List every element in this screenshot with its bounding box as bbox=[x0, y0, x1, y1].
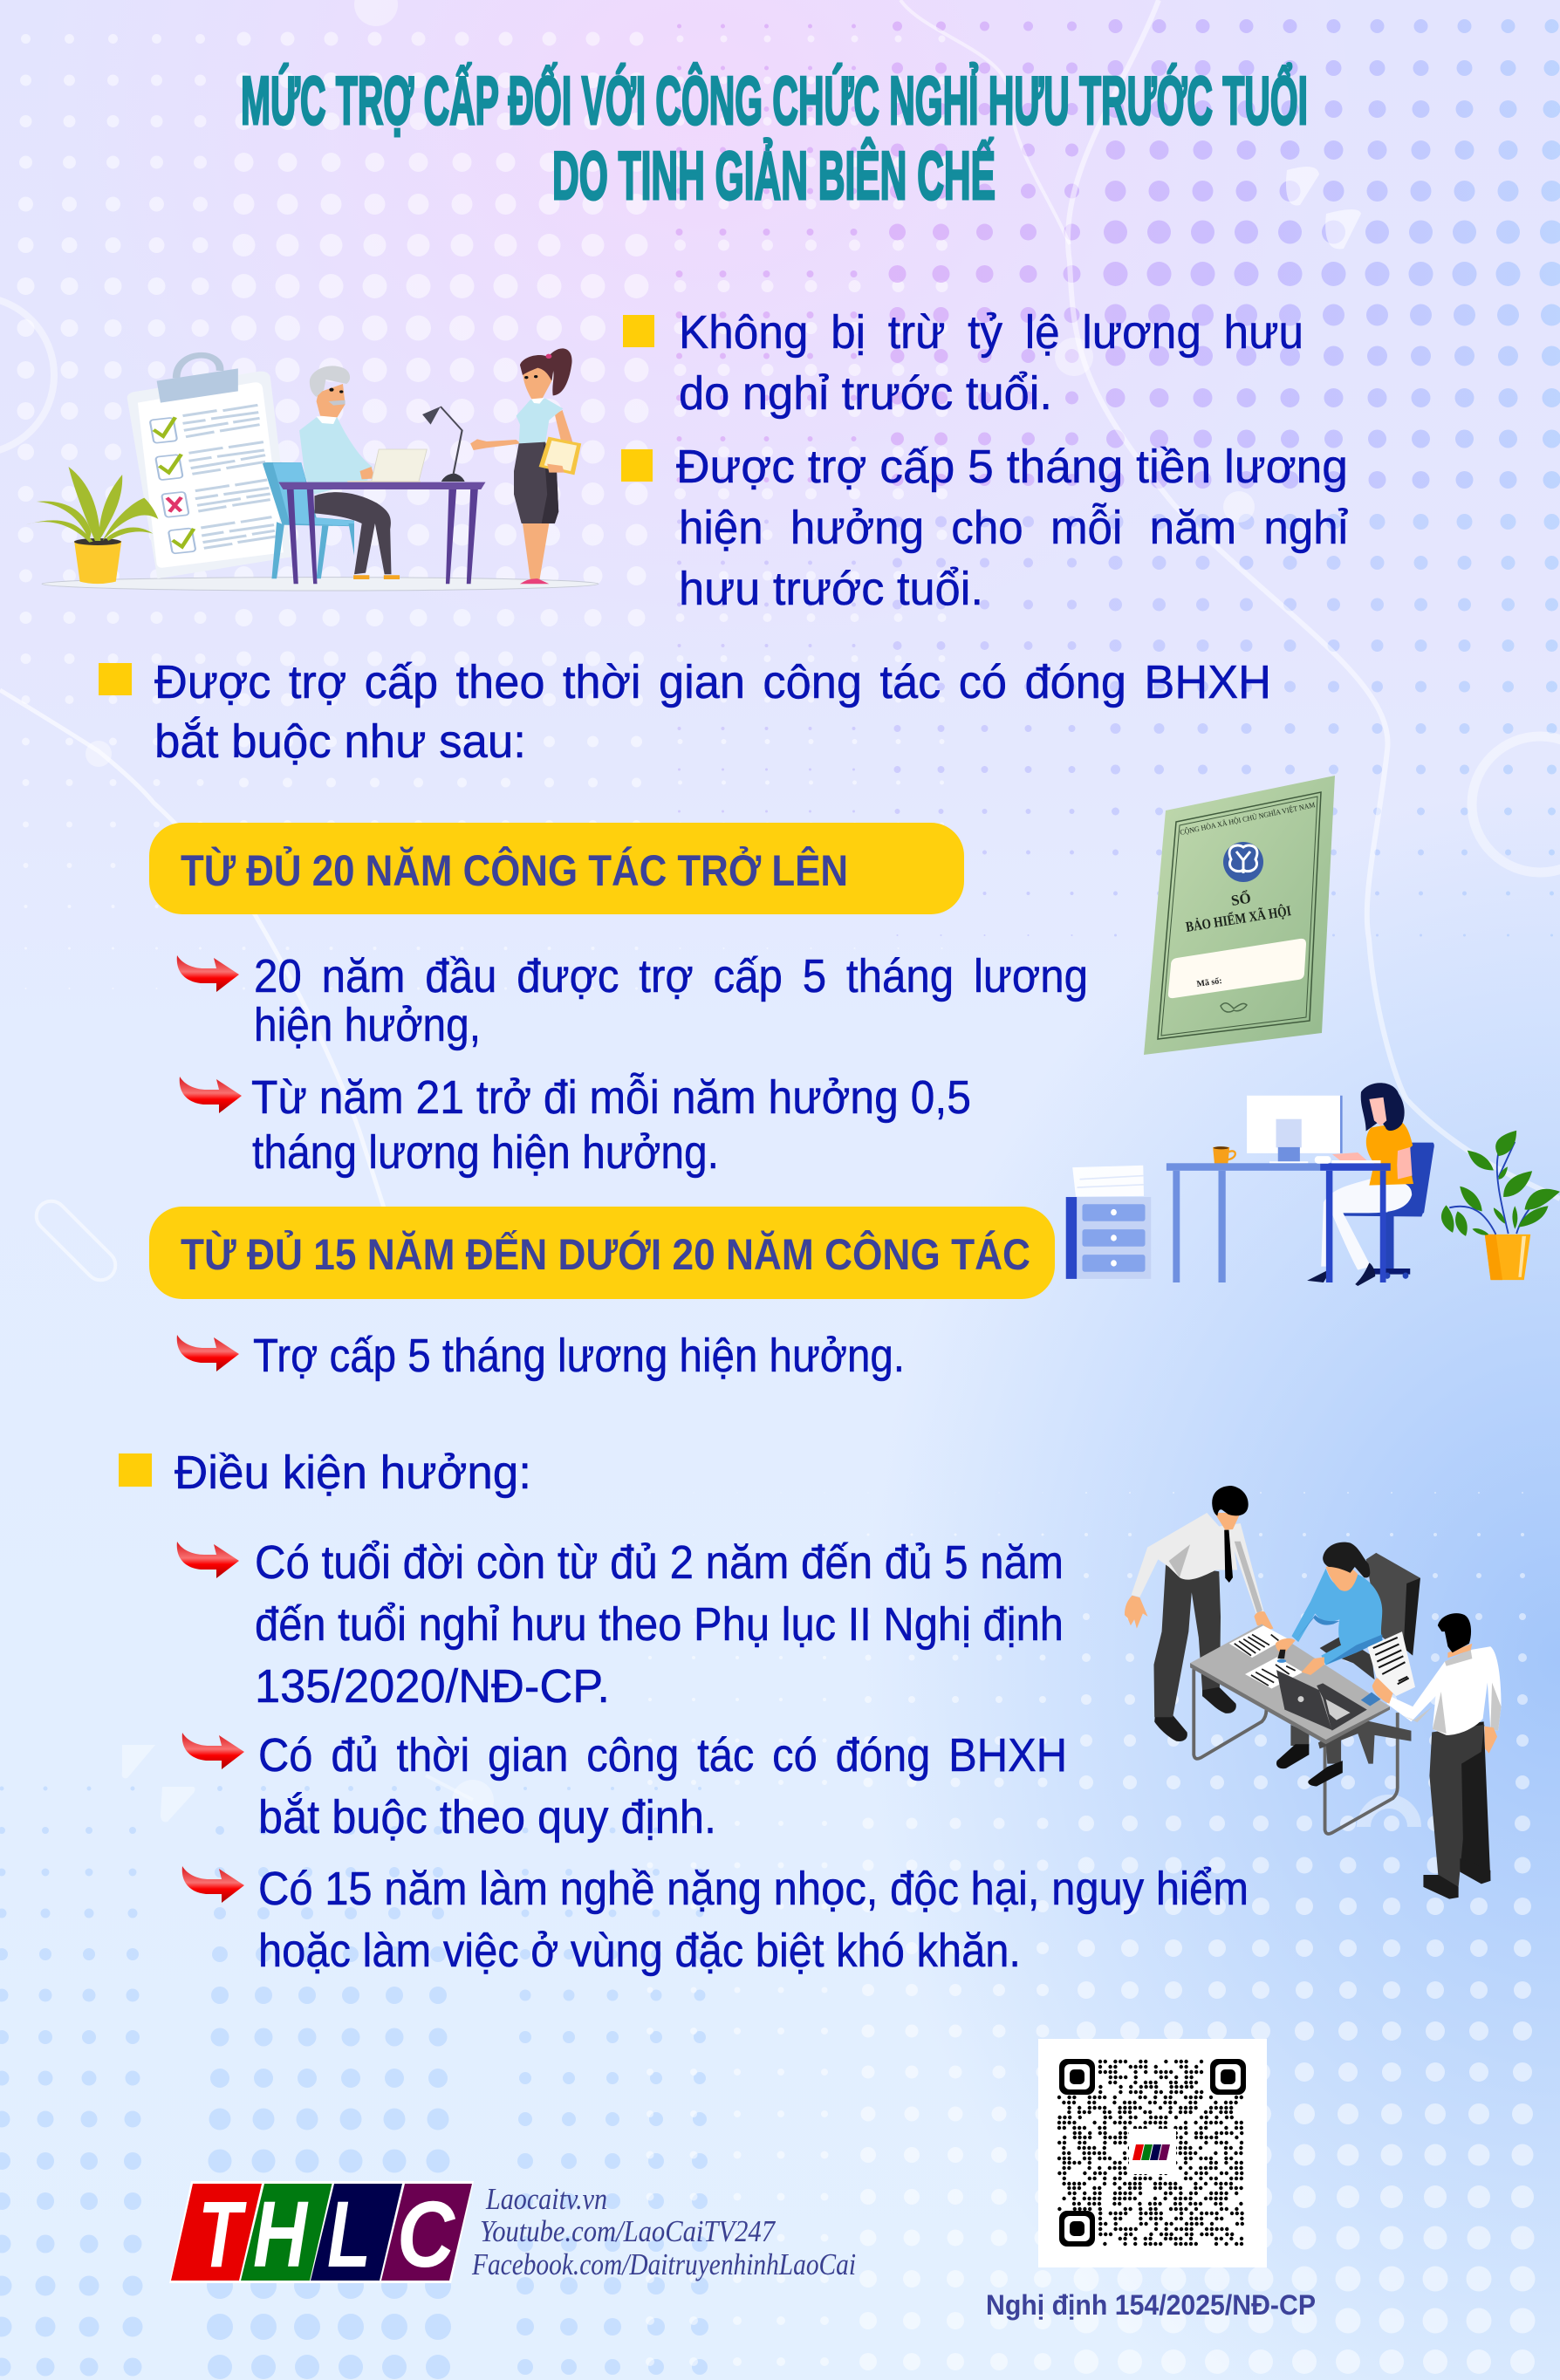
bullet: allowance by working time bbox=[99, 656, 1271, 768]
icon: red arrow bbox=[177, 1335, 239, 1371]
illustration: social insurance book: SỔ bbox=[1229, 889, 1252, 909]
item: from year 21: Từ năm 21 trở đi mỗi năm hưởng 0,5 bbox=[251, 1071, 971, 1124]
bullet: allowance by working time: Được trợ cấp theo thời gian công tác có đóng BHXH bbox=[154, 656, 1271, 708]
bullet: allowance by working time: bắt buộc như sau: bbox=[154, 715, 526, 768]
condition: social insurance period: Có đủ thời gian công tác có đóng BHXH bbox=[258, 1729, 1067, 1782]
illustration: social insurance book: BẢO HIỂM XÃ HỘI bbox=[1185, 902, 1292, 935]
heading pill: 20 years or more bbox=[149, 823, 964, 914]
station links: Laocaitv.vn bbox=[485, 2182, 607, 2216]
illustration: three colleagues at table bbox=[1125, 1486, 1502, 1899]
bullet: eligibility conditions: Điều kiện hưởng: bbox=[174, 1446, 531, 1499]
person: standing man with paper bbox=[1367, 1613, 1502, 1899]
condition: social insurance period: bắt buộc theo quy định. bbox=[258, 1791, 716, 1843]
heading pill: 15 to under 20 years: TỪ ĐỦ 15 NĂM ĐẾN DƯỚI 20 NĂM CÔNG TÁC bbox=[181, 1229, 1030, 1279]
condition: age: đến tuổi nghỉ hưu theo Phụ lục II Nghị định bbox=[255, 1598, 1064, 1651]
item: 5 months allowance: Trợ cấp 5 tháng lương hiện hưởng. bbox=[253, 1330, 905, 1382]
station links bbox=[471, 2182, 856, 2281]
condition: age bbox=[177, 1536, 1064, 1713]
bullet marker bbox=[621, 449, 653, 482]
table with papers bbox=[1190, 1624, 1411, 1834]
illustration: social insurance book: Mã số: bbox=[1196, 976, 1222, 989]
title bbox=[241, 62, 1308, 214]
illustration: woman at desk with cabinet and plant bbox=[1066, 1083, 1560, 1286]
logo: THLC: L bbox=[327, 2181, 371, 2287]
person: standing man with tie bbox=[1125, 1486, 1273, 1741]
station links: Facebook.com/DaitruyenhinhLaoCai bbox=[471, 2247, 856, 2281]
bullet list: top right: hiện hưởng cho mỗi năm nghỉ bbox=[679, 502, 1348, 554]
icon: red arrow bbox=[180, 1077, 242, 1113]
item: from year 21: tháng lương hiện hưởng. bbox=[252, 1126, 719, 1179]
emblem bbox=[1223, 842, 1263, 882]
bullet list: top right: Không bị trừ tỷ lệ lương hưu bbox=[679, 306, 1303, 359]
icon: red arrow bbox=[177, 955, 239, 992]
station links: Youtube.com/LaoCaiTV247 bbox=[480, 2214, 776, 2248]
illustration: social insurance book bbox=[1144, 776, 1335, 1055]
QR code bbox=[1038, 2039, 1267, 2267]
bullet list: top right bbox=[621, 306, 1348, 615]
title: DO TINH GIẢN BIÊN CHẾ bbox=[552, 137, 996, 214]
item: from year 21 bbox=[180, 1071, 971, 1179]
condition: age: 135/2020/NĐ-CP. bbox=[255, 1660, 610, 1713]
icon: red arrow bbox=[182, 1866, 244, 1903]
heading pill: 20 years or more: TỪ ĐỦ 20 NĂM CÔNG TÁC TRỞ LÊN bbox=[181, 845, 848, 895]
condition: hazardous work bbox=[182, 1863, 1249, 1977]
bullet list: top right: Được trợ cấp 5 tháng tiền lương bbox=[676, 441, 1348, 493]
icon: red arrow bbox=[177, 1542, 239, 1578]
person: seated woman bbox=[1276, 1542, 1420, 1679]
item: first 20 years: hiện hưởng, bbox=[254, 999, 481, 1051]
logo: THLC bbox=[169, 2181, 474, 2287]
illustration: office workers and checklist bbox=[25, 332, 599, 591]
logo: THLC: T bbox=[198, 2181, 247, 2287]
illustration: social insurance book: CỘNG HÒA XÃ HỘI CHỦ NGHĨA VIỆT NAM bbox=[1179, 800, 1317, 837]
bullet list: top right: do nghỉ trước tuổi. bbox=[679, 367, 1052, 420]
bullet list: top right: hưu trước tuổi. bbox=[679, 563, 983, 615]
item: first 20 years bbox=[177, 950, 1088, 1051]
item: first 20 years: 20 năm đầu được trợ cấp 5 tháng lương bbox=[254, 950, 1088, 1002]
condition: hazardous work: hoặc làm việc ở vùng đặc biệt khó khăn. bbox=[258, 1925, 1021, 1977]
condition: social insurance period bbox=[182, 1729, 1067, 1843]
bullet marker bbox=[119, 1453, 152, 1487]
source caption: Nghị định 154/2025/NĐ-CP bbox=[986, 2289, 1316, 2321]
logo: THLC: C bbox=[397, 2181, 456, 2287]
heading pill: 15 to under 20 years bbox=[149, 1207, 1055, 1299]
logo: THLC: H bbox=[253, 2181, 309, 2287]
icon: red arrow bbox=[182, 1733, 244, 1769]
bullet marker bbox=[99, 663, 132, 695]
laptop and phone bbox=[1276, 1670, 1381, 1731]
condition: age: Có tuổi đời còn từ đủ 2 năm đến đủ 5 năm bbox=[255, 1536, 1064, 1589]
bullet marker bbox=[623, 315, 654, 347]
condition: hazardous work: Có 15 năm làm nghề nặng nhọc, độc hại, nguy hiểm bbox=[258, 1863, 1249, 1915]
